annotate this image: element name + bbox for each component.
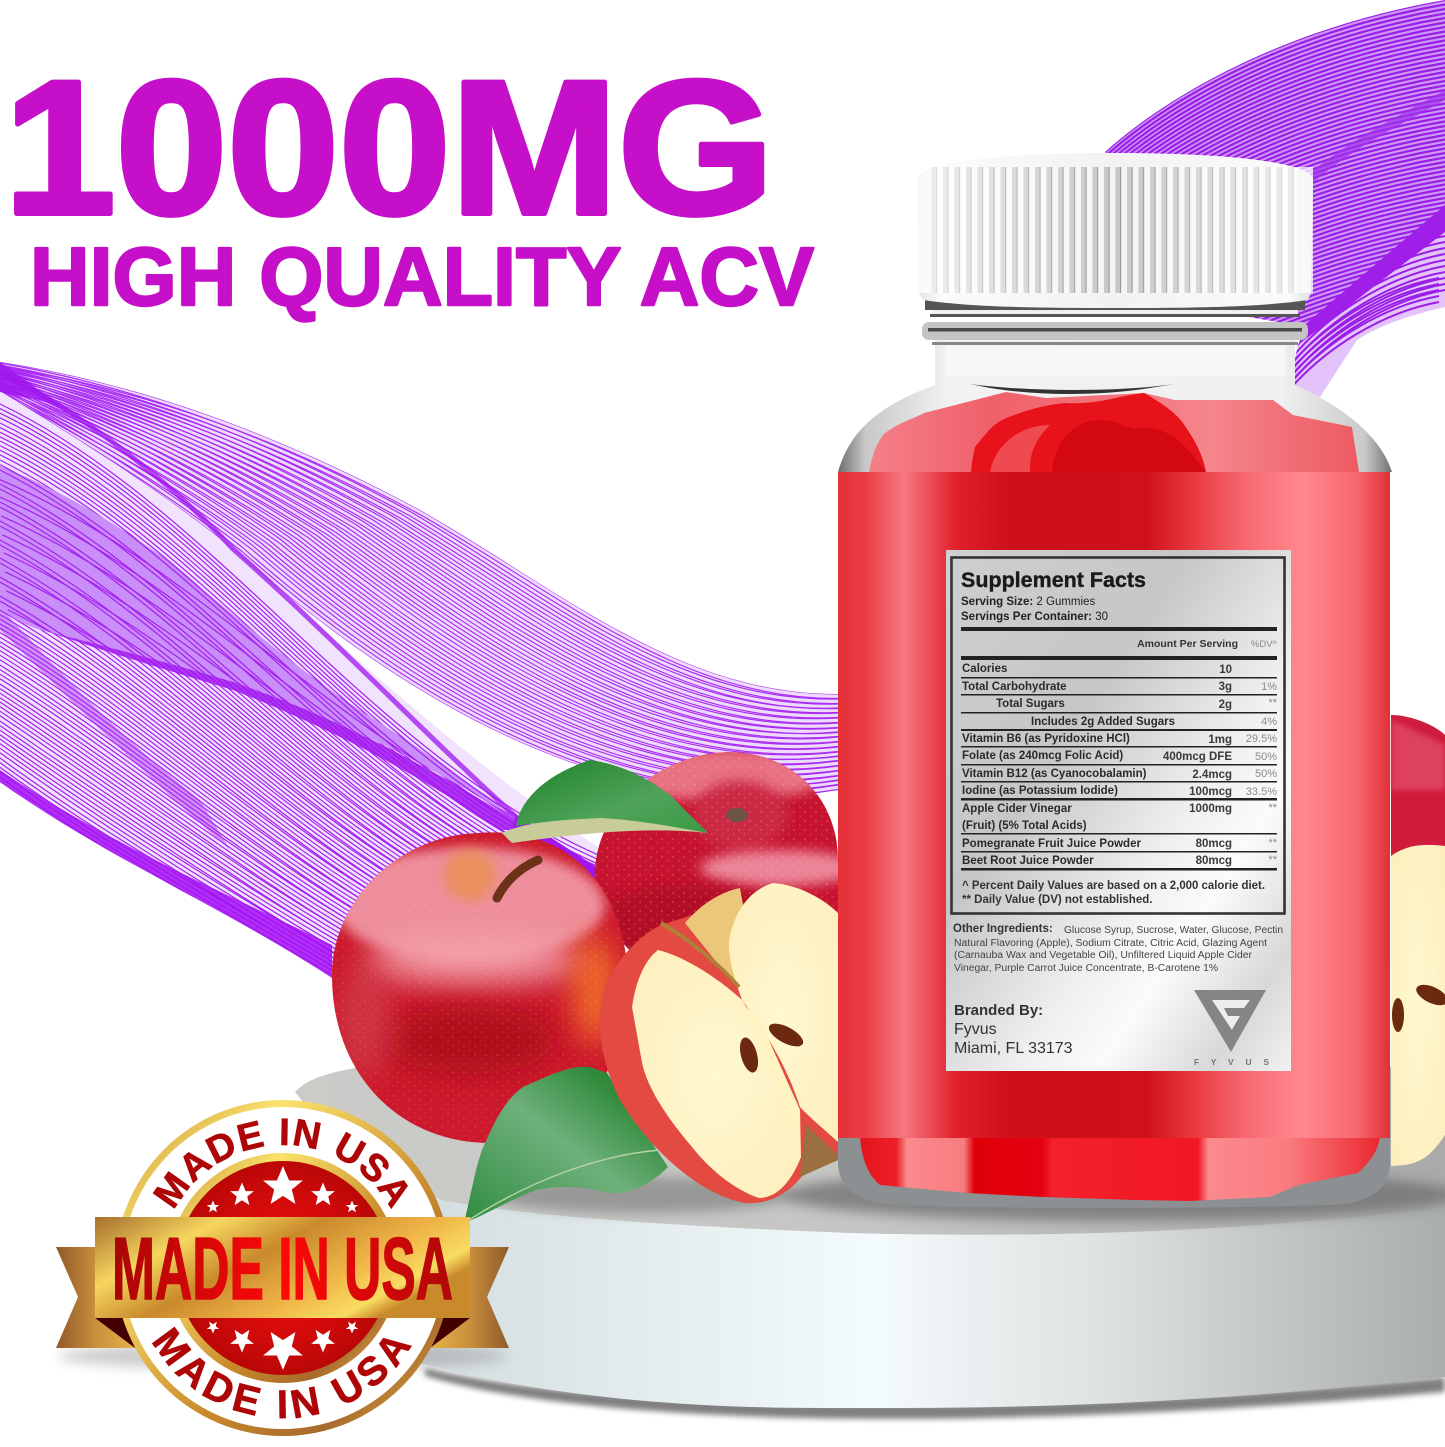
platform top [295, 1067, 1445, 1235]
serving info [961, 596, 1108, 623]
table rows: Folate (as 240mcg Folic Acid) [962, 750, 1123, 762]
table rules [961, 627, 1277, 870]
icon: fyvus logo [1194, 990, 1269, 1067]
footnotes: ^ Percent Daily Values are based on a 2,000 calorie diet. [962, 880, 1265, 892]
table rows: Vitamin B12 (as Cyanocobalamin) [962, 768, 1147, 780]
apple: back [594, 752, 838, 950]
banner [95, 1217, 470, 1318]
other ingredients: Glucose Syrup, Sucrose, Water, Glucose, Pectin [1064, 925, 1283, 936]
apple: right side whole [1391, 715, 1445, 860]
table rows: ** [1268, 697, 1278, 709]
table rows: 80mcg [1196, 838, 1232, 850]
table rows: Vitamin B6 (as Pyridoxine HCl) [962, 733, 1130, 745]
facts label [946, 550, 1291, 1071]
footnotes [962, 880, 1265, 906]
table rows: 4% [1261, 716, 1277, 728]
banner text: MADE IN USA [112, 1219, 453, 1318]
apple: right side half [1391, 845, 1445, 1166]
apple stem [497, 860, 538, 898]
wave: dark strand middle [49, 632, 530, 830]
table header: %DV^ [1251, 639, 1278, 650]
bottle shadow on platform [780, 1169, 1445, 1221]
table rows: 1000mg [1189, 803, 1232, 815]
leaf: top [502, 760, 708, 843]
table rows: Total Carbohydrate [962, 681, 1067, 693]
wave: dense centre [0, 466, 515, 818]
table rows: Total Sugars [996, 698, 1065, 710]
table rows: (Fruit) (5% Total Acids) [962, 820, 1087, 832]
footnotes: ** Daily Value (DV) not established. [962, 894, 1152, 906]
curved text top: MADE IN USA [152, 1118, 408, 1210]
table rows: Calories [962, 663, 1007, 675]
branded by [954, 1002, 1073, 1057]
apples group [330, 715, 1445, 1223]
bottle glass shoulder [838, 340, 1392, 472]
table rows: 29.5% [1246, 733, 1277, 745]
table rows: Beet Root Juice Powder [962, 855, 1094, 867]
leaf: bottom [464, 1067, 668, 1223]
table rows: 1mg [1208, 734, 1232, 746]
wave: dark band top [0, 372, 525, 825]
table rows: Iodine (as Potassium Iodide) [962, 785, 1118, 797]
apple: front [330, 830, 630, 1145]
bottle [838, 153, 1392, 1208]
icon: fyvus logo: F Y V U S [1194, 1057, 1269, 1067]
half apple stem [661, 923, 739, 987]
badge: made in usa [56, 1100, 509, 1436]
purple wave: right top [935, 0, 1445, 485]
platform [295, 1067, 1445, 1419]
half apple skin [600, 900, 838, 1203]
wave: band between apples [510, 815, 604, 890]
facts heading: Supplement Facts [961, 569, 1146, 592]
table rows: 50% [1255, 751, 1277, 763]
title: 1000MG: 1000MG [4, 42, 774, 254]
table header: Amount Per Serving [1137, 638, 1238, 650]
serving info: Servings Per Container: 30 [961, 611, 1108, 623]
wave: top right dark band [1298, 205, 1445, 345]
apple: half cut [600, 883, 838, 1203]
facts box border [952, 558, 1284, 914]
table rows: Apple Cider Vinegar [962, 803, 1072, 815]
wave: top right lower fan [1295, 232, 1445, 397]
table rows [962, 663, 1278, 867]
apple shadow [490, 1177, 790, 1213]
table rows: 1% [1261, 681, 1277, 693]
curved text bottom: MADE IN USA [152, 1326, 412, 1418]
wave: bottom edge band [0, 770, 332, 978]
wave: upper ribbon lines [0, 362, 838, 794]
seal rings [115, 1100, 451, 1436]
half apple core [800, 1125, 838, 1177]
stars [207, 1166, 358, 1370]
platform side [420, 1190, 1445, 1408]
apple calyx [726, 808, 748, 822]
table rows: 2g [1219, 699, 1232, 711]
bottle label red [838, 472, 1390, 1138]
half apple centre flesh [742, 995, 800, 1135]
badge shadow [58, 1342, 508, 1370]
purple wave: left ribbon [0, 360, 840, 1000]
half apple lower flesh [632, 950, 801, 1198]
branded by: Fyvus [954, 1021, 997, 1038]
other ingredients: Other Ingredients: [953, 923, 1053, 935]
table rows: 2.4mcg [1192, 769, 1232, 781]
gummies bottom [860, 1137, 1380, 1201]
other ingredients: Vinegar, Purple Carrot Juice Concentrate, B-Carotene 1% [954, 963, 1218, 974]
other ingredients: (Carnauba Wax and Vegetable Oil), Unfiltered Liquid Apple Cider [954, 950, 1253, 961]
table rows: ** [1268, 802, 1278, 814]
ribbon tails [56, 1247, 509, 1348]
table rows: ** [1268, 854, 1278, 866]
half apple tan skin [685, 888, 760, 1000]
wave: top right strand [1310, 90, 1445, 182]
bottle cap [917, 153, 1313, 308]
table rows: 80mcg [1196, 855, 1232, 867]
table rows: Pomegranate Fruit Juice Powder [962, 838, 1141, 850]
gummies top [869, 392, 1359, 472]
other ingredients [953, 923, 1283, 974]
half apple upper flesh [729, 883, 838, 1142]
table rows: 10 [1219, 664, 1232, 676]
serving info: Serving Size: 2 Gummies [961, 596, 1095, 608]
other ingredients: Natural Flavoring (Apple), Sodium Citrate, Citric Acid, Glazing Agent [954, 938, 1267, 949]
wave: dark band top left [0, 362, 60, 405]
table rows: 50% [1255, 768, 1277, 780]
wave: neck sliver [935, 372, 955, 390]
wave: lower dense strand [0, 607, 230, 850]
branded by: Miami, FL 33173 [954, 1040, 1073, 1057]
platform shadow [425, 1368, 1445, 1419]
table rows: ** [1268, 837, 1278, 849]
branded by: Branded By: [954, 1002, 1043, 1019]
subtitle: high quality acv: HIGH QUALITY ACV [30, 230, 814, 323]
table rows: Includes 2g Added Sugars [1031, 716, 1175, 728]
bottle bottom rim [838, 1130, 1390, 1208]
table rows: 100mcg [1189, 786, 1232, 798]
neck rings [922, 300, 1308, 394]
table rows: 3g [1219, 681, 1232, 693]
wave: lower ribbon lines [0, 392, 598, 976]
wave: top right lines [1105, 0, 1445, 325]
table rows: 33.5% [1246, 786, 1277, 798]
table rows: 400mcg DFE [1163, 751, 1232, 763]
half apple seeds [765, 1019, 807, 1051]
